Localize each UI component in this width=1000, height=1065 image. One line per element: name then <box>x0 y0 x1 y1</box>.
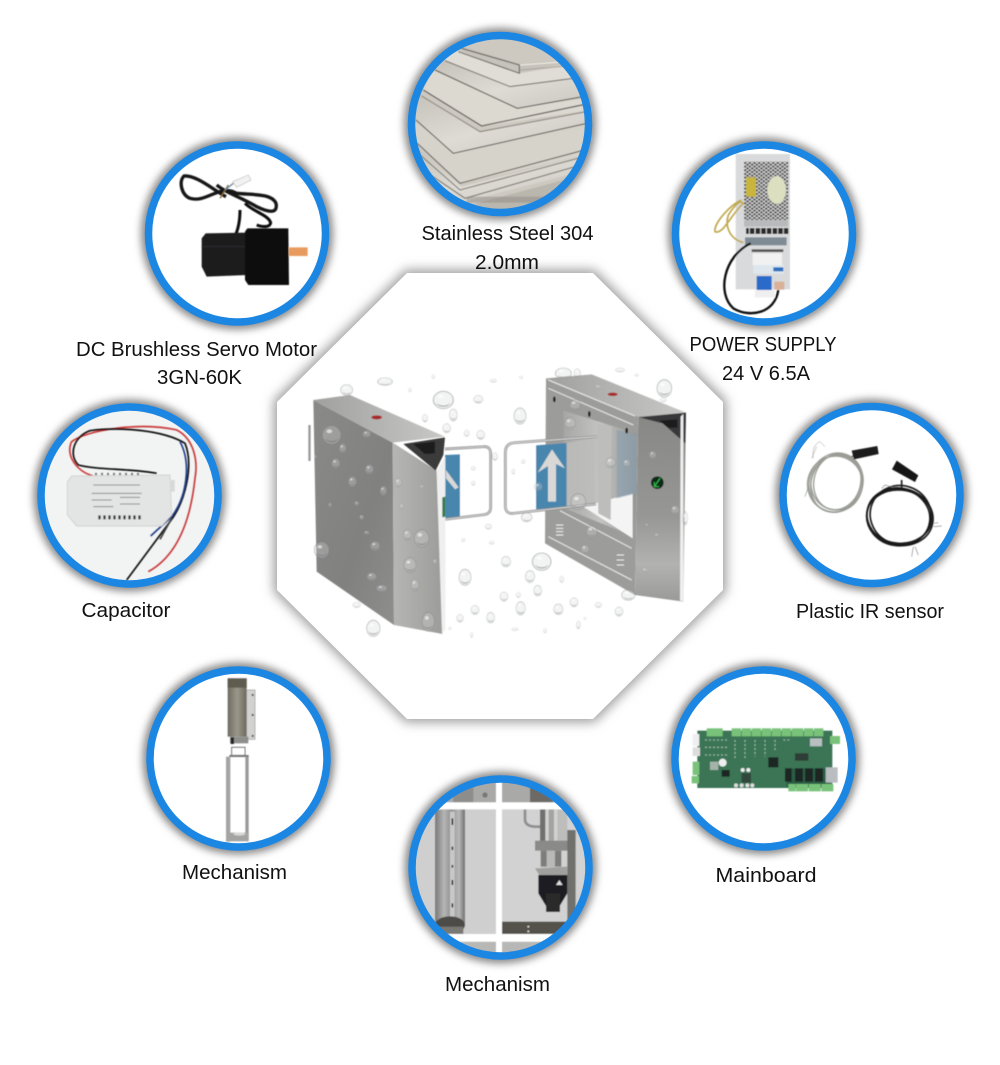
label: motor: DC Brushless Servo Motor <box>76 339 317 361</box>
label: plastic IR sensor: Plastic IR sensor <box>796 601 944 623</box>
label: motor model: 3GN-60K <box>157 367 243 389</box>
panel: capacitor <box>34 400 226 622</box>
right cabinet <box>545 374 686 602</box>
image: capacitor module with wires <box>67 427 196 580</box>
left barrier <box>445 447 491 519</box>
ring <box>41 407 218 584</box>
water drops <box>314 368 688 638</box>
image: mechanism close-up photos <box>416 782 586 952</box>
panel: DC motor <box>76 138 333 389</box>
label: mainboard: Mainboard <box>716 865 816 887</box>
right barrier <box>505 437 597 513</box>
panel: stainless steel <box>400 20 600 274</box>
image: stainless steel sheets <box>415 39 585 209</box>
ring <box>412 779 589 956</box>
panel: mechanism left <box>142 662 334 884</box>
image: mechanism with arm <box>226 678 255 842</box>
ring <box>783 406 960 584</box>
image: power supply unit <box>715 154 790 313</box>
panel: power supply <box>668 138 860 385</box>
ring <box>412 36 588 212</box>
illustration: swing turnstile gate with water drops <box>308 368 688 638</box>
label: mechanism: Mechanism <box>182 862 287 884</box>
ring <box>150 670 327 847</box>
image: green circuit board <box>692 728 840 791</box>
image: IR sensors with coiled cables <box>798 442 942 557</box>
ring <box>675 670 852 847</box>
panel: mechanism bottom <box>400 770 600 996</box>
ring <box>148 145 326 322</box>
panel: mainboard <box>668 662 860 887</box>
image: DC brushless servo motor <box>181 175 308 285</box>
label: power supply: POWER SUPPLY <box>690 334 836 356</box>
label: mechanism bottom: Mechanism <box>445 974 550 996</box>
left cabinet <box>308 395 445 634</box>
panel: plastic IR sensor <box>776 399 968 623</box>
label: stainless steel: Stainless Steel 304 <box>422 223 594 245</box>
panel: central octagon with turnstile <box>277 273 723 719</box>
label: capacitor: Capacitor <box>82 600 171 622</box>
label: power rating: 24 V 6.5A <box>722 363 811 385</box>
ring <box>676 145 852 322</box>
label: thickness: 2.0mm <box>475 252 539 274</box>
